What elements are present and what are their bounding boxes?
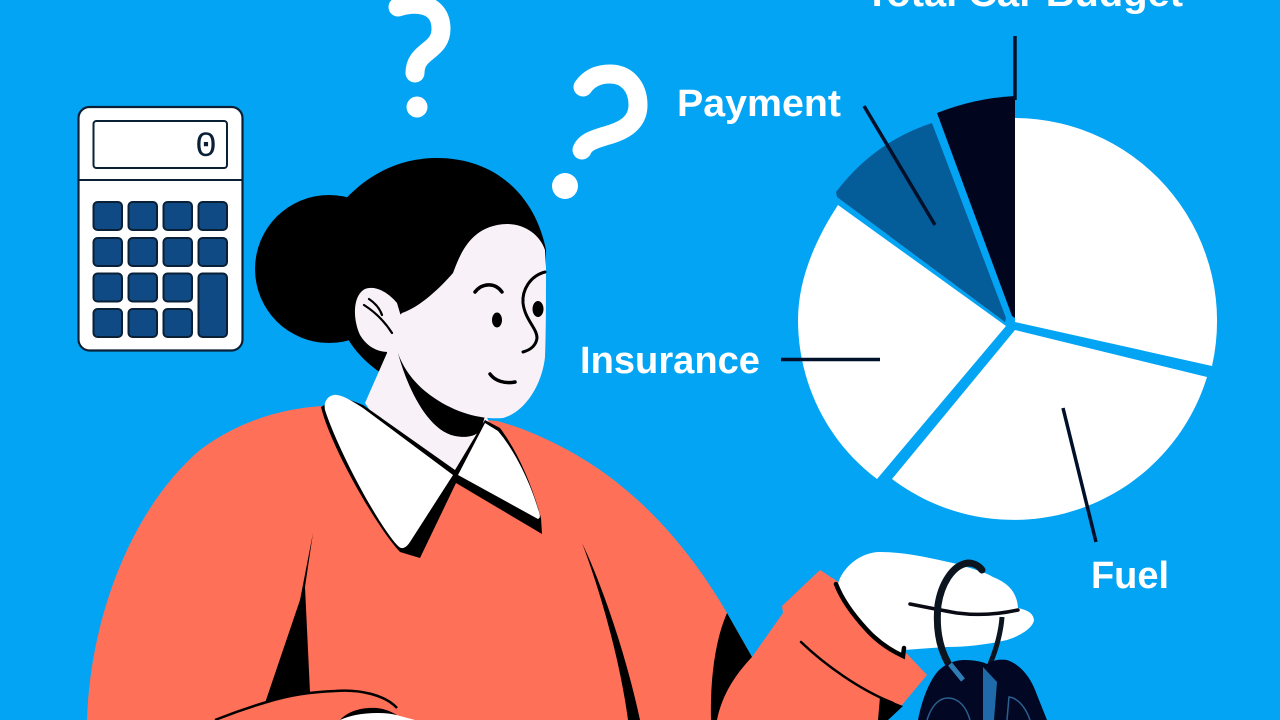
pie slice: dark segment (937, 96, 1015, 318)
leader line: payment (864, 106, 935, 225)
leader line: insurance (781, 358, 880, 361)
collar left (325, 395, 453, 548)
right eye (532, 301, 544, 317)
forearm line (215, 691, 397, 720)
label: payment: Payment (677, 83, 841, 125)
pie chart: total car budget (781, 36, 1217, 542)
ear lines (364, 299, 392, 333)
fob clasp (950, 664, 963, 680)
eyebrow (475, 285, 502, 292)
fob body (918, 660, 1047, 720)
nose line (523, 272, 545, 352)
icon: car key fob (918, 563, 1047, 720)
lap hand (340, 710, 415, 720)
underarm shadow (711, 613, 752, 720)
icon: calculator (78, 107, 242, 350)
label: fuel: Fuel (1091, 555, 1169, 597)
neck shadow (398, 353, 485, 437)
fob strap (983, 667, 997, 720)
collar shadow (321, 396, 542, 558)
ear (355, 288, 405, 352)
key ring (937, 563, 982, 663)
lap hand shadow (340, 708, 397, 720)
hair bun and hair (255, 158, 546, 380)
fob button arcs (927, 697, 1030, 720)
cuff edge (836, 584, 904, 656)
neck (365, 343, 490, 480)
key ring second strand (990, 617, 1002, 664)
pie slice: fuel (892, 330, 1207, 520)
finger line (910, 604, 1018, 614)
pie slice: white top right (1015, 118, 1217, 366)
hand (838, 552, 1034, 654)
sweater fold left (265, 533, 313, 703)
pie slice: insurance (798, 205, 1006, 479)
leader line: total car budget (1013, 36, 1017, 100)
collar right (458, 423, 540, 519)
face (385, 224, 546, 418)
sweater body (87, 406, 927, 720)
icon: question mark right (552, 74, 638, 199)
left eye (492, 312, 502, 328)
smile (490, 374, 515, 383)
leader line: fuel (1063, 408, 1096, 542)
sleeve shadow (878, 697, 903, 720)
icon: calculator: 0 (195, 127, 217, 167)
pie slice: payment (836, 123, 1006, 322)
icon: question mark left (398, 4, 441, 117)
sweater fold right (582, 543, 640, 720)
person: woman holding car keys (87, 158, 1034, 720)
label: insurance: Insurance (580, 340, 760, 382)
cuff fold line (801, 642, 893, 703)
